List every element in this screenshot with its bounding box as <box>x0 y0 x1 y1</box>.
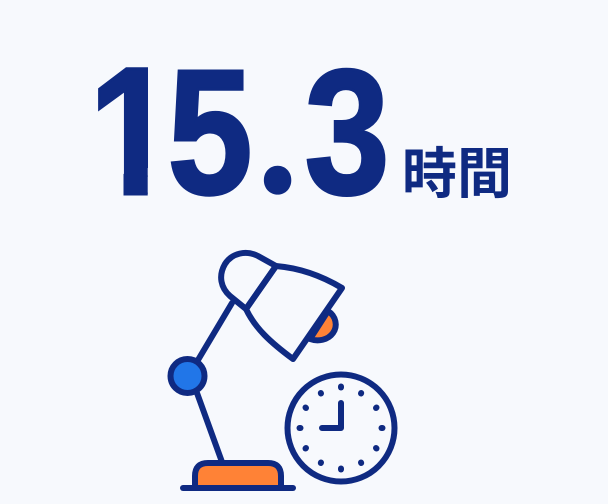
clock ticks <box>300 386 382 470</box>
upper arm <box>198 303 232 360</box>
big number: 1 <box>89 29 176 233</box>
big number <box>98 67 386 197</box>
icon: clock <box>288 374 394 482</box>
lamp shade <box>246 266 342 359</box>
lamp bulb <box>310 311 336 340</box>
lamp foot <box>183 485 293 491</box>
heading: 15.3 hours <box>98 67 508 198</box>
lamp cap <box>221 253 276 309</box>
unit: 時間 <box>402 143 512 205</box>
joint <box>170 359 204 393</box>
big number: . <box>253 20 302 236</box>
lamp base <box>195 463 281 488</box>
big number: 5 <box>168 34 253 232</box>
big number: 3 <box>304 34 390 232</box>
lower arm <box>197 393 222 462</box>
clock hands <box>322 403 341 428</box>
clock face <box>288 374 394 482</box>
icon: desk lamp <box>170 253 342 488</box>
